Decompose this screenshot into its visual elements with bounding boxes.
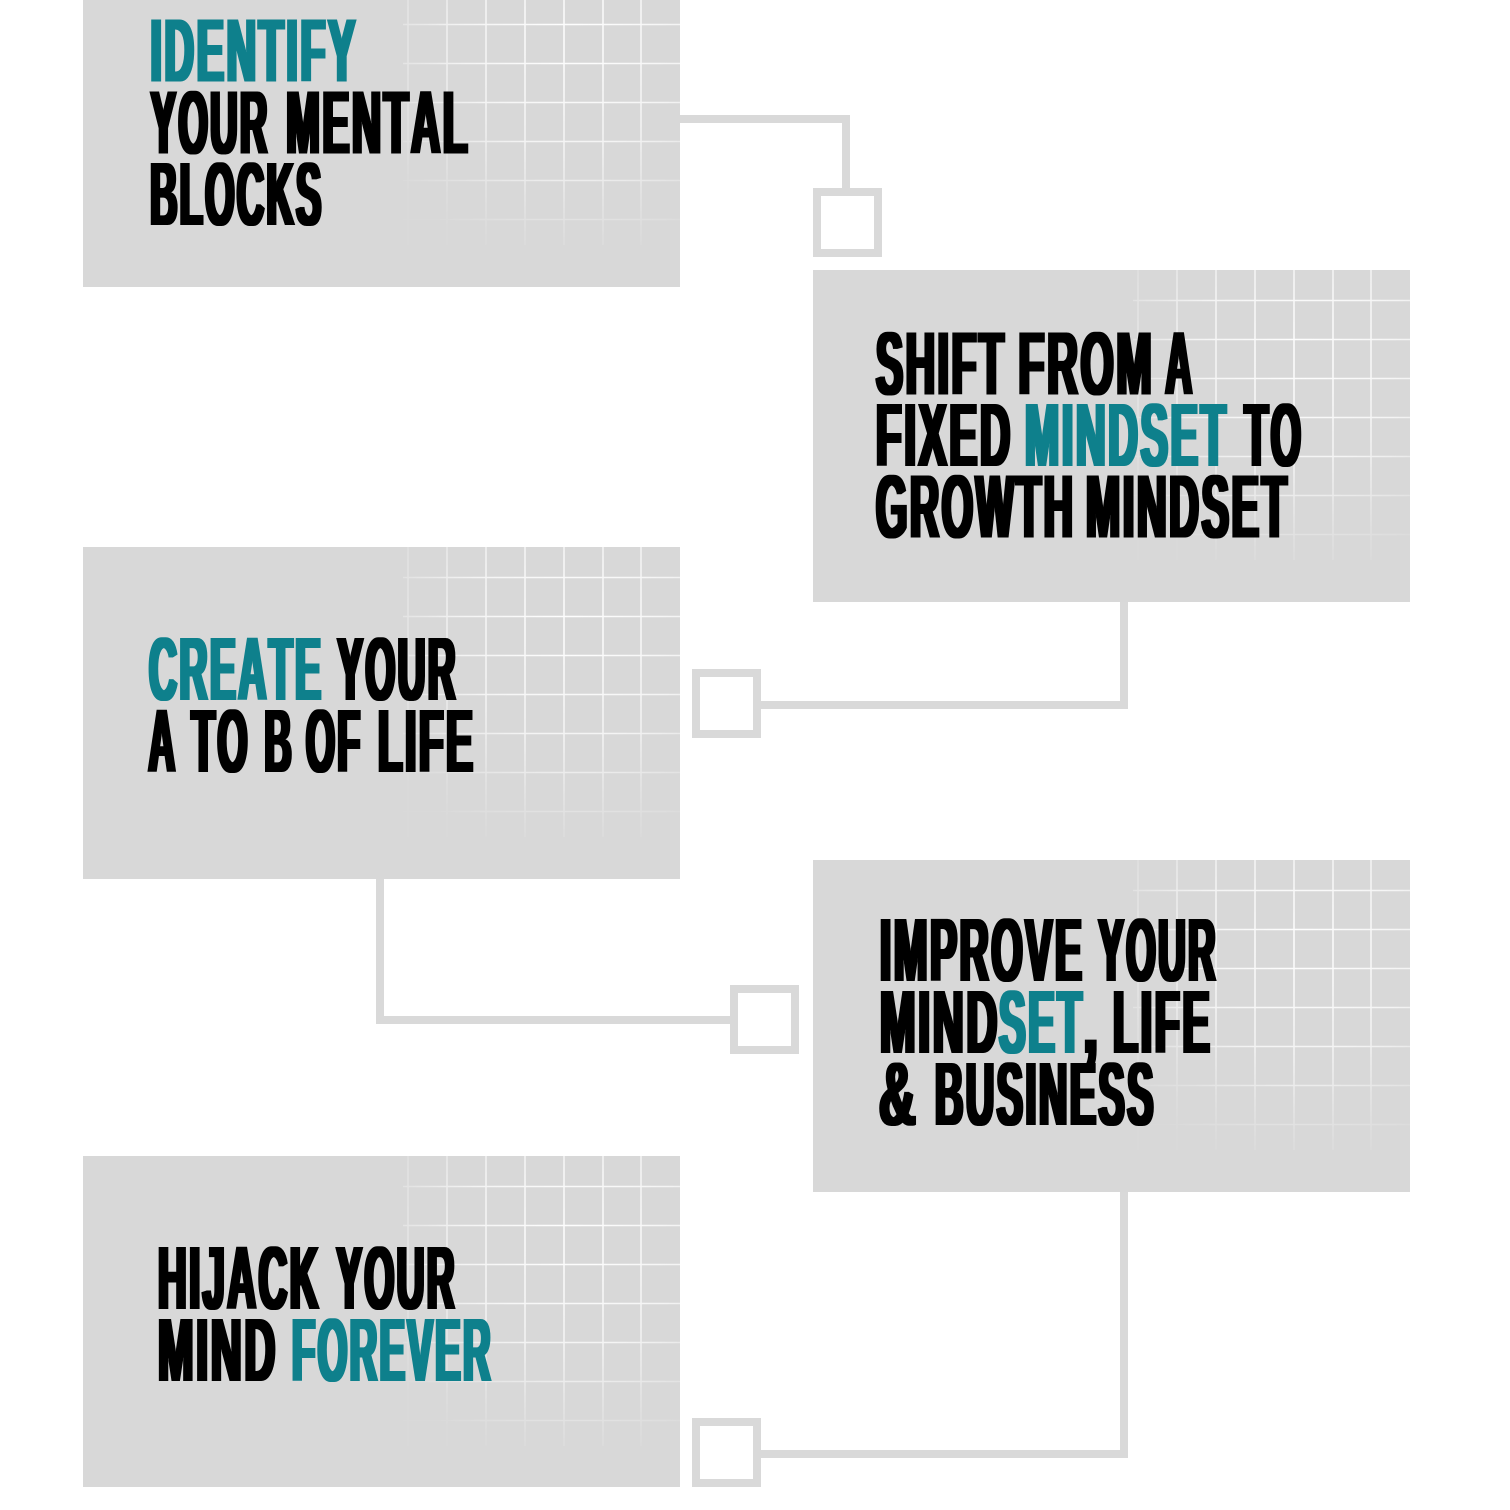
panel: identify your mental blocks (83, 0, 680, 287)
heading: improve your mindset, life and business: & (879, 1045, 919, 1145)
heading: shift from a fixed mindset to growth mindset: FROM (1018, 314, 1154, 414)
heading: shift from a fixed mindset to growth mindset (876, 314, 1304, 558)
heading: create your a to b of life: B (264, 692, 294, 792)
heading: identify your mental blocks: BLOCKS (150, 145, 324, 245)
checkbox: step 4 (696, 1422, 757, 1483)
panel: identify your mental blocks: MENTAL (286, 74, 470, 174)
checkbox: step 2 (696, 673, 757, 734)
heading: improve your mindset, life and business: SET (999, 973, 1084, 1073)
panel: improve your mindset, life and business: YOUR (1098, 901, 1218, 1001)
connector: step 4 to step 5 (761, 1192, 1124, 1454)
heading: hijack your mind forever: YOUR (336, 1229, 457, 1329)
heading: identify your mental blocks: IDENTIFY (150, 2, 358, 102)
heading: hijack your mind forever: MIND (158, 1301, 278, 1401)
panel: hijack your mind forever: FOREVER (292, 1301, 493, 1401)
connector: step 3 to step 4 (380, 879, 730, 1020)
heading: shift from a fixed mindset to growth mindset: SHIFT (876, 314, 1006, 414)
panel: improve your mindset, life and business: LIFE (1113, 973, 1212, 1073)
heading: improve your mindset, life and business: BUSINESS (935, 1045, 1156, 1145)
connector: step 2 to step 3 (761, 602, 1124, 705)
heading: create your a to b of life (148, 620, 476, 792)
panel: shift from a fixed mindset: TO (1244, 386, 1304, 486)
heading: identify your mental blocks: YOUR (151, 74, 270, 174)
heading: create your a to b of life: TO (192, 692, 250, 792)
panel: improve your mindset, life and business (813, 860, 1410, 1192)
checkbox: step 1 (817, 192, 878, 253)
heading: shift from a fixed mindset to growth mindset: FIXED (876, 386, 1013, 486)
heading: hijack your mind forever: HIJACK (158, 1229, 321, 1329)
heading: create your a to b of life: OF (306, 692, 362, 792)
heading: improve your mindset, life and business: , (1083, 973, 1102, 1073)
connector: step 1 to step 2 (680, 119, 846, 188)
heading: shift from a fixed mindset to growth mindset: MINDSET (1025, 386, 1228, 486)
heading: improve your mindset, life and business: MIND (880, 973, 1000, 1073)
heading: create your a to b of life: A (148, 692, 178, 792)
heading: shift from a fixed mindset to growth mindset: A (1166, 314, 1194, 414)
heading: hijack your mind forever (158, 1229, 493, 1401)
panel: hijack your mind forever (83, 1156, 680, 1487)
heading: identify your mental blocks (150, 2, 470, 245)
panel: shift from a fixed mindset (813, 270, 1410, 602)
checkbox: step 3 (734, 989, 795, 1050)
heading: improve your mindset, life and business: IMPROVE (880, 901, 1084, 1001)
heading: improve your mindset, life and business (879, 901, 1218, 1145)
panel: create your a to b of life (83, 547, 680, 879)
panel: create your a to b of life: LIFE (378, 692, 476, 792)
heading: create your a to b of life: CREATE (149, 620, 324, 720)
panel: create your a to b of life: YOUR (338, 620, 458, 720)
heading: shift from a fixed mindset to growth mindset: GROWTH (876, 458, 1076, 558)
